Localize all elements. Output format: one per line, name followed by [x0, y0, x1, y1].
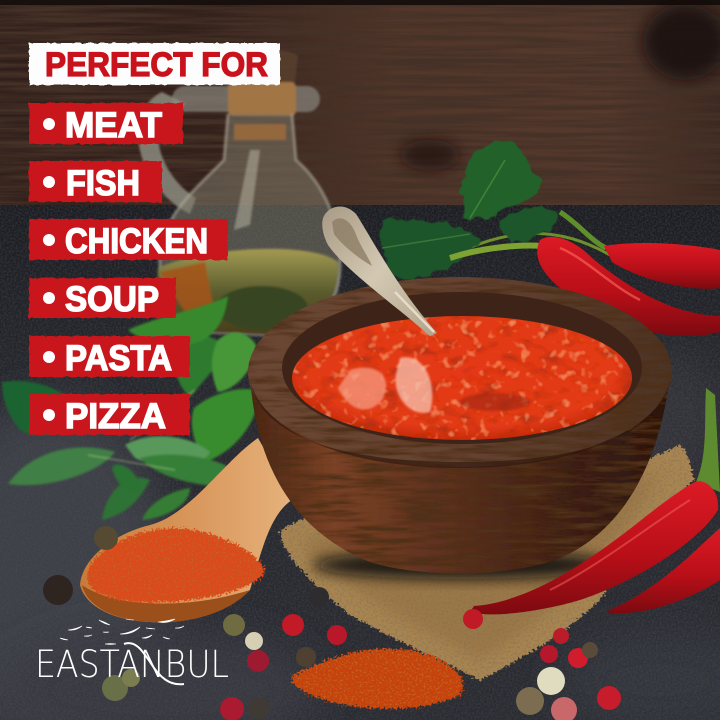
- birds: [60, 619, 184, 644]
- label: chicken: CHICKEN: [65, 222, 208, 261]
- clay bowl: [248, 277, 672, 579]
- label: pasta: PASTA: [65, 339, 172, 378]
- slate table: [0, 205, 720, 720]
- wooden spoon with paprika: [80, 438, 295, 622]
- label: meat: [29, 103, 183, 145]
- label: meat: MEAT: [65, 106, 162, 145]
- red chillies lower right: [470, 388, 720, 614]
- label: pizza: [29, 394, 190, 436]
- paprika pile: [291, 649, 463, 708]
- parsley: [380, 140, 610, 277]
- brand logo: [35, 619, 229, 686]
- top right chillies: [450, 212, 720, 336]
- sauce highlights: [338, 357, 530, 413]
- label: pizza: PIZZA: [65, 397, 166, 436]
- silver spoon: [322, 206, 437, 336]
- label: perfect for: PERFECT FOR: [45, 46, 268, 84]
- swoosh: [124, 643, 184, 684]
- burlap mat: [279, 445, 694, 680]
- wood background: [0, 0, 720, 208]
- label: fish: [29, 161, 162, 203]
- label: fish: FISH: [66, 164, 140, 203]
- label: soup: [29, 278, 176, 319]
- label: soup: SOUP: [65, 280, 159, 319]
- label: pasta: [29, 336, 190, 378]
- peppercorns: [43, 526, 621, 720]
- oil bottle: [138, 48, 340, 335]
- wordmark: EASTANBUL: [35, 643, 229, 686]
- basil leaves: [2, 296, 258, 520]
